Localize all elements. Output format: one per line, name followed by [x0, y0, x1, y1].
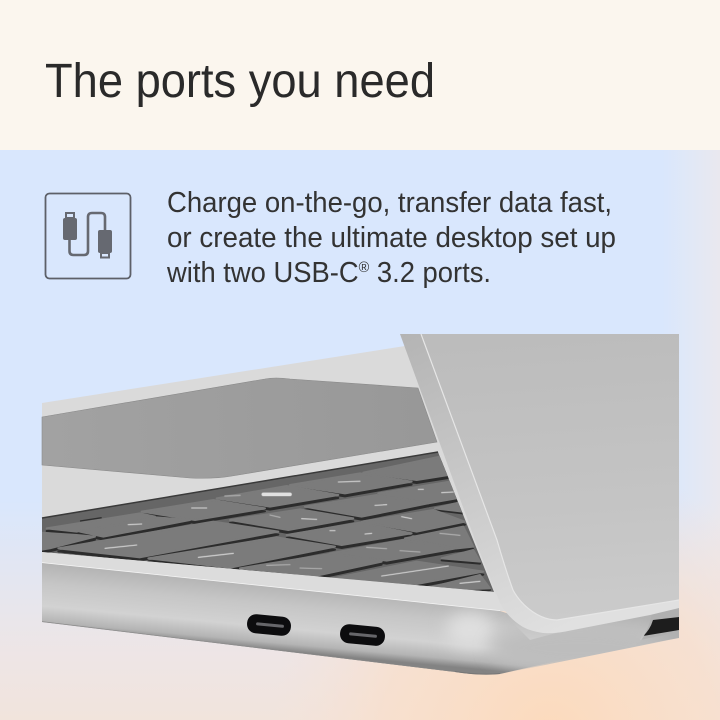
text block: description: ® [359, 259, 369, 276]
lid surface [421, 334, 679, 620]
USB-C port 1 [246, 613, 292, 637]
text block: description: or create the ultimate desktop set up [167, 222, 616, 254]
panel: gradient background [0, 150, 720, 720]
side slot [636, 605, 679, 646]
front lip highlight [42, 552, 512, 612]
keyboard well [42, 452, 494, 592]
text block: description: with two USB-C [167, 257, 367, 289]
laptop front edge [42, 563, 652, 675]
lid hinge edge [400, 334, 679, 633]
text block: description [166, 187, 616, 289]
USB-C port 2 [339, 623, 386, 647]
screen reflection panel [42, 378, 437, 478]
icon: USB-C cable [46, 194, 130, 278]
text block: description: Charge on-the-go, transfer data fast, [167, 187, 612, 219]
title: The ports you need [45, 55, 435, 108]
laptop illustration [40, 334, 679, 675]
header band [0, 0, 720, 150]
keyboard keys [40, 457, 490, 592]
keyboard top shadow [42, 452, 438, 518]
text block: description: 3.2 ports. [369, 257, 491, 289]
corner shading [42, 612, 670, 675]
laptop base deck [42, 346, 510, 610]
